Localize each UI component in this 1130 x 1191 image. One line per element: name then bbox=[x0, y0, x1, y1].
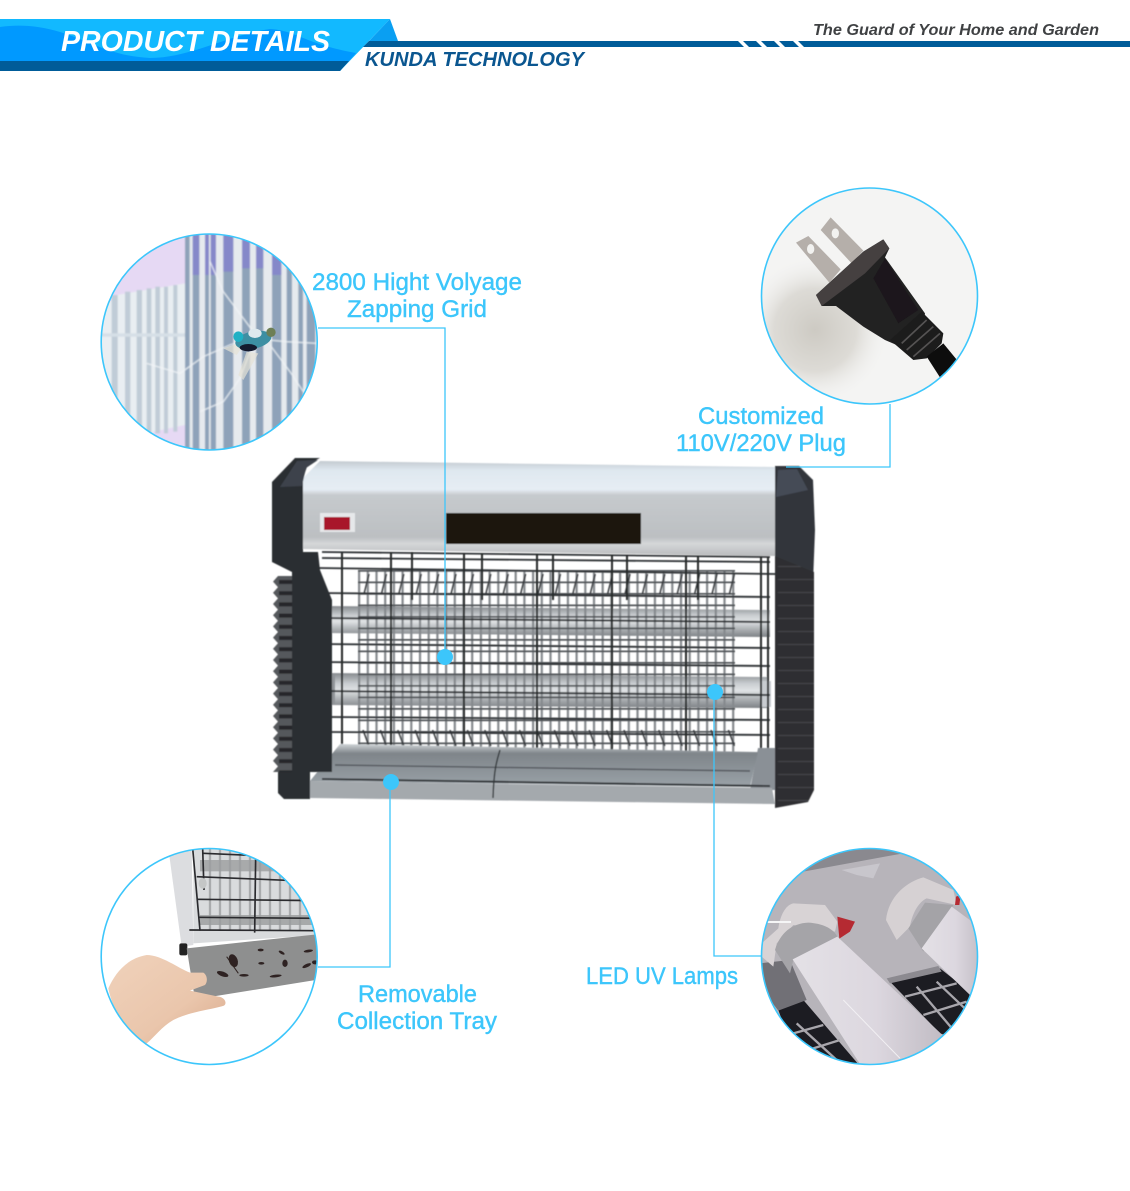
zapper: vertical wires bbox=[342, 552, 768, 786]
banner: dark lower strip bbox=[0, 61, 349, 71]
zapper: display strip bbox=[446, 513, 641, 544]
lamps photo: right socket bbox=[886, 877, 961, 952]
product: bug zapper bbox=[272, 458, 815, 808]
zapper: top panel bbox=[303, 461, 775, 556]
label: zapping grid: Zapping Grid bbox=[347, 296, 487, 323]
lamps photo: black mesh areas bbox=[890, 968, 980, 1047]
zapper: power switch bbox=[320, 513, 355, 532]
banner title: PRODUCT DETAILS bbox=[61, 26, 331, 58]
lamps photo: left metal collar bbox=[775, 923, 837, 973]
zapper: inner mesh bbox=[358, 570, 735, 754]
callout: lamp connector bbox=[707, 684, 761, 956]
zapper: lamp lower bbox=[317, 673, 771, 708]
label: zapping grid: 2800 Hight Volyage bbox=[312, 269, 522, 296]
slogan: The Guard of Your Home and Garden bbox=[813, 22, 1099, 39]
label: collection tray bbox=[337, 981, 497, 1035]
lamps photo: top edge bbox=[804, 849, 900, 872]
banner: fold triangle bbox=[369, 19, 398, 41]
zapper: right end cap bbox=[775, 466, 815, 808]
plug: strain relief bbox=[894, 314, 944, 360]
zapper: horizontal wires bbox=[318, 552, 775, 735]
label: zapping grid bbox=[312, 269, 522, 323]
fly bbox=[223, 328, 276, 380]
label: collection tray: Removable bbox=[358, 981, 477, 1008]
zapper: lower wire hooks bbox=[358, 730, 735, 746]
label: plug bbox=[676, 403, 846, 457]
lamps photo: right tube bbox=[922, 906, 976, 995]
callout: tray connector bbox=[318, 774, 399, 967]
plug: blades bbox=[796, 217, 865, 283]
zapper: left end cap bbox=[272, 458, 332, 799]
circle photo: removable tray with hand bbox=[100, 848, 320, 1066]
banner: bright band bbox=[0, 19, 390, 71]
label: plug: Customized bbox=[698, 403, 824, 430]
callout: zapping grid connector bbox=[318, 328, 453, 665]
tray photo: hand bbox=[108, 955, 226, 1043]
header banner bbox=[0, 19, 1130, 71]
plug: cable bbox=[927, 343, 956, 377]
circle photo: power plug bbox=[740, 188, 980, 406]
lamps photo: left socket bbox=[762, 903, 855, 967]
circle photo: UV lamps close-up bbox=[760, 847, 983, 1070]
circle photo: zapping grid with fly bbox=[100, 233, 318, 451]
label: plug: 110V/220V Plug bbox=[676, 430, 846, 457]
plug: moulded body bbox=[816, 239, 925, 345]
lamps photo: left tube bbox=[793, 937, 945, 1067]
tray photo: tray bbox=[187, 934, 320, 999]
tray photo: device body bbox=[168, 848, 320, 955]
zapper: collection tray bbox=[310, 744, 775, 804]
label: UV lamps: LED UV Lamps bbox=[586, 963, 738, 990]
banner: wave bbox=[0, 26, 356, 71]
label: collection tray: Collection Tray bbox=[337, 1008, 497, 1035]
header rule bbox=[363, 41, 1130, 47]
rule stripes bbox=[738, 41, 804, 47]
callout: plug connector bbox=[786, 404, 890, 467]
company name: KUNDA TECHNOLOGY bbox=[365, 49, 586, 71]
zapper: upper wire hooks bbox=[358, 574, 735, 594]
tray photo: insects bbox=[216, 949, 318, 978]
zapper: lamp upper bbox=[318, 604, 770, 637]
